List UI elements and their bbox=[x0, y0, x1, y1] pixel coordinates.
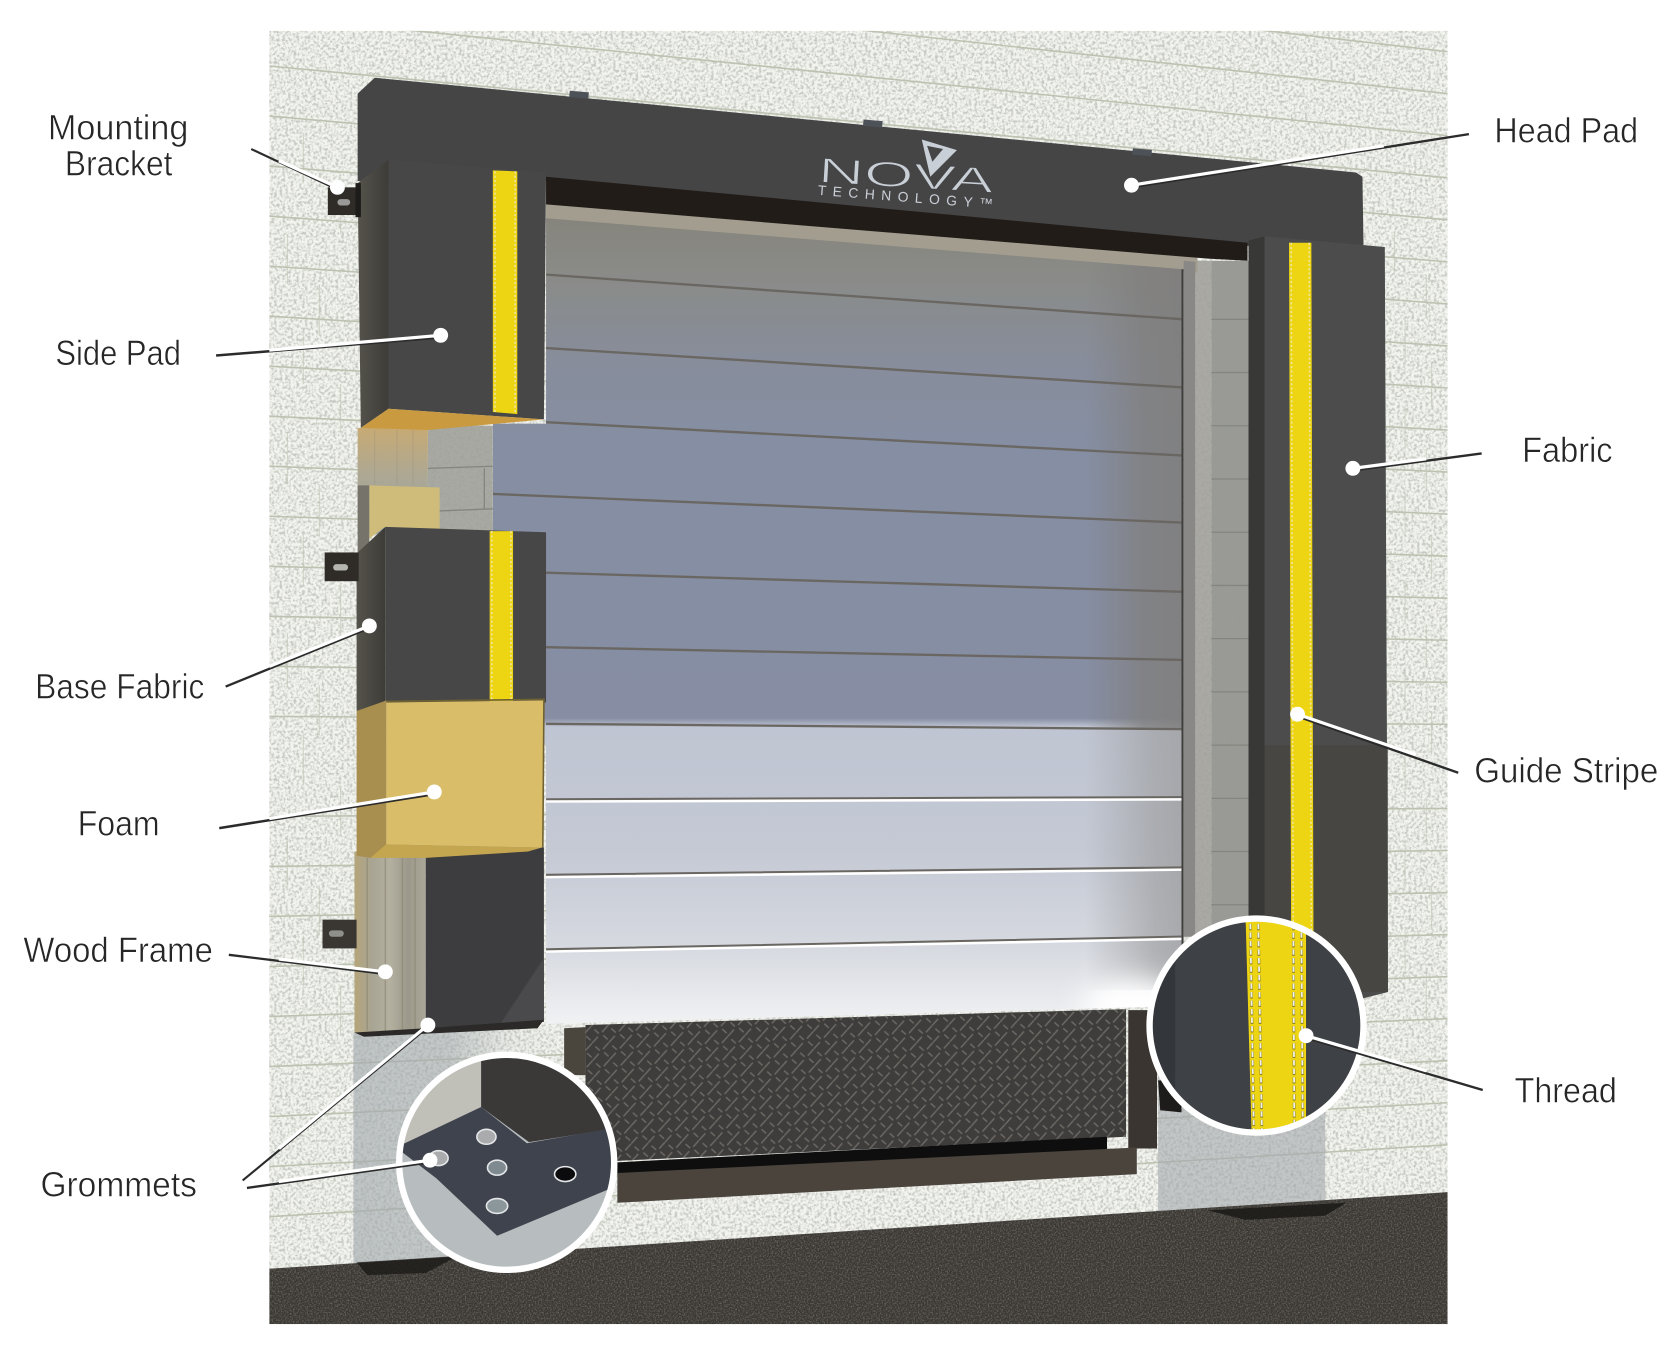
logo: Nova Technology bbox=[817, 139, 996, 212]
label: Grommets: Grommets bbox=[40, 1165, 197, 1204]
door frame bbox=[546, 202, 1197, 937]
leader: side pad bbox=[216, 328, 448, 356]
sectional door panels bbox=[493, 208, 1195, 1038]
top side pad with guide stripe bbox=[358, 160, 546, 430]
head pad with logo bbox=[358, 78, 1364, 261]
label: Mounting Bracket: Mounting bbox=[48, 108, 188, 147]
leader: guide stripe bbox=[1290, 707, 1458, 773]
wall shadows below pads and recess bbox=[353, 261, 1325, 1269]
logo: Nova Technology: TECHNOLOGY™ bbox=[817, 182, 994, 212]
upper wood frame section bbox=[358, 428, 440, 554]
leader: wood frame bbox=[229, 955, 393, 979]
base fabric pad with guide stripe bbox=[357, 527, 546, 711]
exposed foam block bbox=[357, 699, 544, 858]
building wall bbox=[269, 0, 1448, 1324]
label: Mounting Bracket: Bracket bbox=[65, 145, 173, 184]
label: Guide Stripe: Guide Stripe bbox=[1474, 751, 1658, 790]
label: Foam: Foam bbox=[78, 805, 160, 844]
detail circle: thread bbox=[1150, 910, 1364, 1139]
leader: fabric bbox=[1345, 453, 1482, 476]
leader: grommets detail bbox=[247, 1153, 437, 1188]
label: Base Fabric: Base Fabric bbox=[35, 667, 204, 706]
leader: thread bbox=[1299, 1028, 1483, 1090]
detail circle: grommets bbox=[394, 1048, 623, 1270]
label: Wood Frame: Wood Frame bbox=[23, 931, 213, 970]
leader lines and dots bbox=[216, 134, 1483, 1188]
label: Fabric: Fabric bbox=[1522, 431, 1613, 470]
logo: Nova Technology: NOVA bbox=[817, 151, 996, 201]
label: Thread: Thread bbox=[1515, 1072, 1617, 1111]
bottom-left wood frame section bbox=[354, 847, 544, 1037]
label: Head Pad: Head Pad bbox=[1494, 112, 1638, 151]
label: Side Pad: Side Pad bbox=[55, 334, 181, 373]
leader: base fabric bbox=[226, 618, 377, 687]
dock leveler bbox=[564, 1007, 1181, 1203]
grommet holes bbox=[429, 1129, 576, 1213]
ground pavement bbox=[269, 1192, 1448, 1324]
leader: mounting bracket bbox=[251, 149, 345, 195]
leader: head pad bbox=[1124, 134, 1469, 193]
right side pad with guide stripe bbox=[1249, 236, 1388, 998]
leader: grommets edge bbox=[243, 1018, 435, 1180]
label: Mounting Bracket bbox=[48, 108, 188, 184]
mounting brackets bbox=[323, 183, 361, 948]
leader: foam bbox=[219, 784, 442, 828]
